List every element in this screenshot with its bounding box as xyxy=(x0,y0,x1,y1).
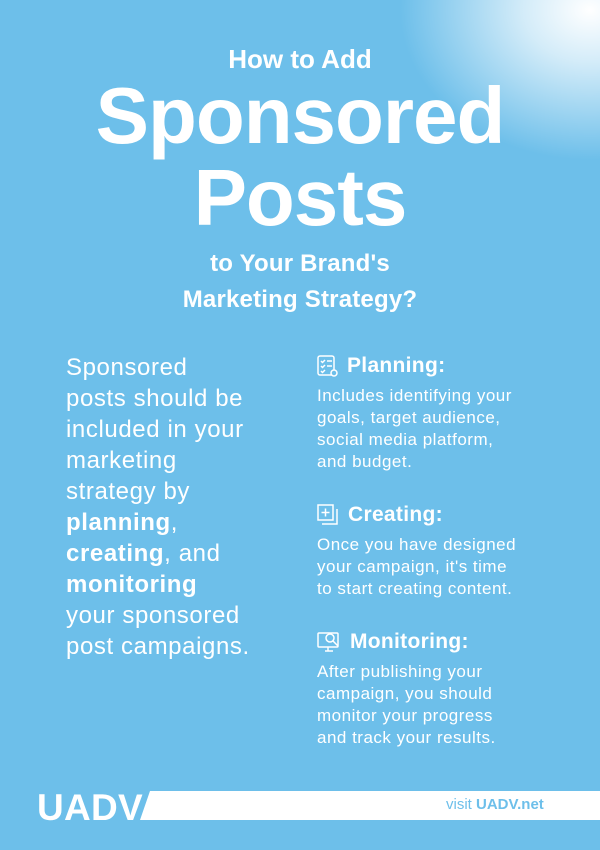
body: planning xyxy=(317,386,512,471)
intro paragraph: your sponsored xyxy=(66,602,240,629)
intro paragraph: post campaigns. xyxy=(66,633,250,660)
footer link: visit UADV.net xyxy=(446,796,544,813)
body: monitoring xyxy=(317,662,496,747)
subtitle: to Your Brand's xyxy=(210,250,390,277)
heading: creating with icon: Creating: xyxy=(348,503,443,526)
body: creating: your campaign, it's time xyxy=(317,557,507,576)
body: monitoring: and track your results. xyxy=(317,728,496,747)
title: posts: Posts xyxy=(194,153,406,242)
footer bar xyxy=(140,791,600,820)
intro paragraph: marketing xyxy=(66,447,177,474)
intro paragraph: Sponsored xyxy=(66,354,188,381)
heading: monitoring with icon: Monitoring: xyxy=(350,630,469,653)
subtitle xyxy=(183,250,417,313)
body: planning: Includes identifying your xyxy=(317,386,512,405)
body: monitoring: campaign, you should xyxy=(317,684,492,703)
body: monitoring: After publishing your xyxy=(317,662,482,681)
body: creating xyxy=(317,535,516,598)
body: planning: social media platform, xyxy=(317,430,493,449)
intro paragraph: included in your xyxy=(66,416,244,443)
footer logo: UADV xyxy=(37,787,143,828)
intro paragraph xyxy=(66,354,250,660)
intro paragraph: planning, xyxy=(66,509,178,536)
body: creating: Once you have designed xyxy=(317,535,516,554)
intro paragraph: strategy by xyxy=(66,478,190,505)
body: planning: and budget. xyxy=(317,452,412,471)
intro paragraph: posts should be xyxy=(66,385,243,412)
intro paragraph: monitoring xyxy=(66,571,197,598)
section: creating xyxy=(317,503,516,598)
title: sponsored: Sponsored xyxy=(96,71,504,160)
subtitle: Marketing Strategy? xyxy=(183,286,417,313)
title: how to add: How to Add xyxy=(228,44,372,74)
body: monitoring: monitor your progress xyxy=(317,706,493,725)
section: planning xyxy=(317,354,512,471)
body: planning: goals, target audience, xyxy=(317,408,501,427)
section: monitoring xyxy=(317,630,496,747)
intro paragraph: creating, and xyxy=(66,540,221,567)
heading: planning with icon: Planning: xyxy=(347,354,445,377)
body: creating: to start creating content. xyxy=(317,579,512,598)
